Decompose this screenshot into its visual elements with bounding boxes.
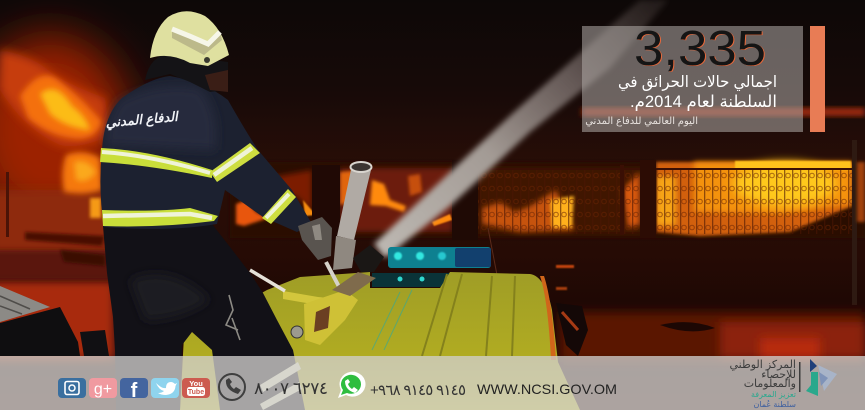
description: السلطنة لعام 2014م.: [630, 93, 777, 111]
accent bar: [810, 26, 825, 132]
caption: اليوم العالمي للدفاع المدني: [585, 116, 698, 127]
water spray: [374, 0, 668, 258]
building: burning warehouse behind fence: [230, 108, 865, 305]
legs and trousers: [103, 224, 305, 410]
social icon: youtube: Tube: [188, 389, 204, 396]
social icon: facebook: f: [131, 380, 138, 402]
whatsapp number: +٩٦٨ ٩١٤٥ ٩١٤٥: [370, 382, 466, 399]
emergency light bar: [372, 228, 497, 287]
phone number: ٨٠٠٧ ٦٢٧٤: [254, 379, 328, 398]
logo: NCSI: المركز الوطني: [729, 359, 796, 371]
social icon: instagram: [58, 378, 86, 398]
hood and neck: [145, 54, 228, 92]
ground: wet reflections: [556, 265, 865, 362]
water cannon: [250, 162, 384, 345]
glow band behind panel: [582, 108, 865, 116]
vehicle roof: yellow fire truck: [180, 272, 588, 410]
statistic number: 3,335: [635, 22, 767, 76]
footer bar: [0, 356, 865, 410]
logo: NCSI: للإحصاء: [761, 369, 796, 381]
firefighter: [100, 11, 332, 410]
icon: phone: [219, 374, 245, 400]
description: اجمالي حالات الحرائق في: [618, 74, 777, 92]
website: WWW.NCSI.GOV.OM: [477, 381, 617, 397]
social icon: youtube: You: [189, 379, 203, 388]
info panel: 3,335: [634, 22, 766, 76]
jacket: [100, 76, 312, 232]
car door bottom left: [0, 286, 109, 356]
logo: NCSI: تعزيز المعرفة: [751, 390, 796, 399]
social icon: facebook: [120, 378, 148, 402]
description: [618, 74, 777, 111]
logo: NCSI: [729, 359, 837, 409]
logo: NCSI: والمعلومات: [744, 378, 796, 390]
social icon: youtube: [182, 378, 210, 398]
social icon: google plus: g+: [94, 381, 112, 398]
reflective stripes: [100, 148, 212, 178]
icon: whatsapp: [338, 372, 366, 398]
glove: [298, 217, 332, 260]
boot stripes: [260, 362, 302, 410]
social icon: google plus: [89, 378, 117, 398]
helmet: [150, 11, 229, 66]
carabiner: [226, 295, 240, 340]
fire: left blaze: [0, 35, 130, 360]
jacket text: الدفاع المدني: [105, 109, 181, 131]
social icon: twitter: [151, 378, 179, 398]
info panel: [582, 22, 803, 132]
logo: NCSI: سلطنة عُمان: [753, 400, 796, 409]
